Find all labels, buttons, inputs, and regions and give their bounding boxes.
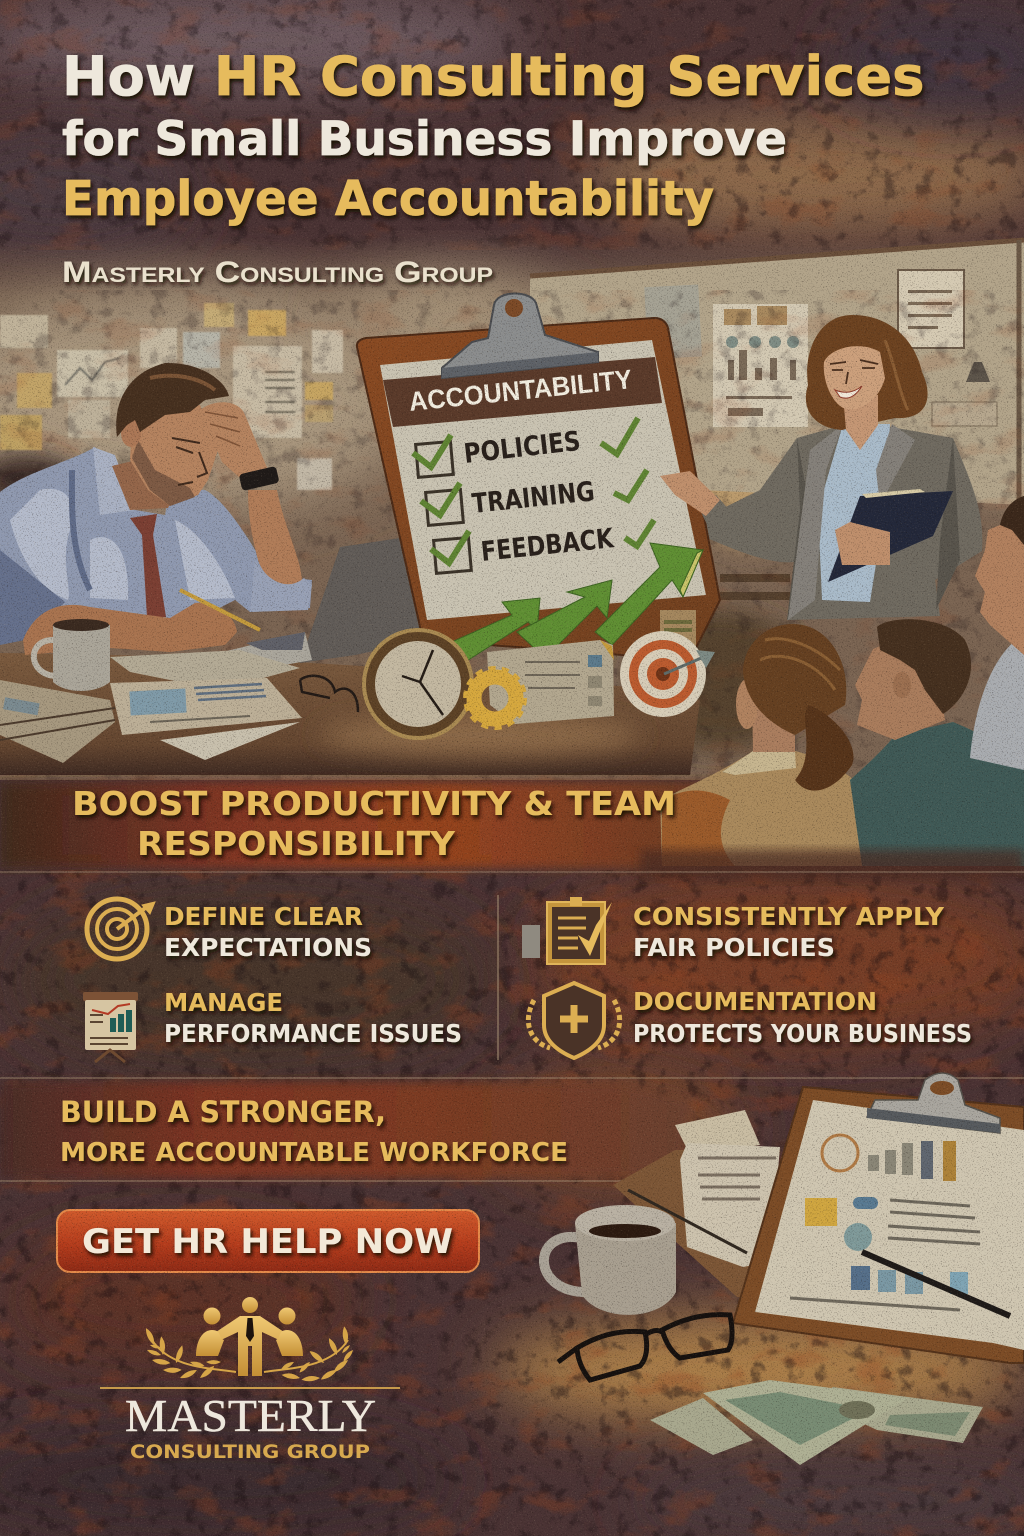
hair (806, 315, 928, 430)
stressed employee (0, 363, 312, 672)
banner heading: productivity: BOOST PRODUCTIVITY & TEAM (72, 784, 676, 823)
banner heading: workforce: MORE ACCOUNTABLE WORKFORCE (60, 1138, 568, 1168)
metal clip (442, 293, 598, 378)
office wall (0, 238, 1024, 780)
icon: target (87, 899, 155, 959)
title line 2: for Small Business Improve (62, 112, 787, 167)
blouse (818, 424, 890, 602)
presenter pointing hand over clipboard (660, 471, 738, 535)
checkboxes and checks (413, 418, 654, 573)
desk (0, 653, 700, 775)
icon: checklist clipboard (522, 897, 612, 964)
call to action label: GET HR HELP NOW (82, 1222, 453, 1262)
logo figures (196, 1297, 303, 1376)
folder of documents (487, 640, 614, 724)
benefits panel tone (0, 871, 1024, 873)
clipboard: accountability (357, 293, 738, 738)
presenter (700, 315, 982, 620)
checklist (462, 426, 616, 568)
banner heading: workforce (60, 1095, 568, 1168)
logo wordmark: MASTERLY (125, 1390, 376, 1441)
neck (843, 395, 878, 450)
heading text: ACCOUNTABILITY (408, 364, 633, 417)
pen on clipboard (862, 1252, 1010, 1316)
pen (180, 590, 260, 630)
checklist: POLICIES (462, 426, 582, 470)
company logo: CONSULTING GROUP (130, 1441, 370, 1463)
benefit: manage performance issues: PERFORMANCE ISSUES (164, 1019, 462, 1048)
benefit: consistently apply fair policies (522, 897, 945, 964)
shirt and torso (0, 447, 312, 645)
face (130, 405, 218, 506)
panel shape: workforce banner (0, 1078, 1024, 1181)
benefits divider (497, 895, 499, 1060)
company logo (100, 1297, 400, 1463)
seated woman (660, 624, 893, 866)
title line 3: Employee Accountability (62, 171, 714, 227)
benefit: manage performance issues: MANAGE (164, 988, 283, 1017)
title (62, 45, 924, 227)
banner heading: productivity (72, 784, 676, 863)
paper (380, 340, 706, 620)
mottled rust on plain background (0, 0, 1024, 250)
coffee mug (544, 1205, 676, 1315)
hair (116, 363, 229, 437)
panel shape: productivity banner (0, 782, 720, 868)
desk still life (544, 1073, 1024, 1465)
panel: benefits (83, 895, 972, 1062)
face (824, 346, 885, 409)
icon: presentation board (83, 992, 138, 1062)
benefit: documentation protects your business: PROTECTS YOUR BUSINESS (633, 1019, 972, 1048)
benefit: manage performance issues (83, 988, 462, 1062)
benefit: consistently apply fair policies: CONSISTENTLY APPLY (633, 902, 945, 931)
laptop behind clipboard (300, 538, 425, 663)
coffee mug on desk (34, 619, 110, 691)
blazer (700, 425, 982, 620)
neck (112, 458, 178, 510)
cash (650, 1380, 983, 1465)
tie (130, 514, 166, 617)
benefit: documentation protects your business: DOCUMENTATION (633, 987, 877, 1016)
writing arm (23, 603, 237, 655)
benefit: define clear expectations: EXPECTATIONS (164, 933, 372, 962)
eyeglasses on desk (300, 676, 358, 712)
raised forearm (248, 490, 302, 585)
heading band (383, 357, 662, 427)
target (620, 631, 715, 717)
growth arrows (445, 543, 703, 662)
logo laurels (146, 1326, 355, 1383)
eyeglasses (558, 1315, 732, 1380)
checklist: TRAINING (470, 476, 596, 520)
pocket watch (364, 630, 472, 738)
watch (239, 466, 280, 491)
audience (640, 496, 1024, 880)
whiteboard (530, 240, 1024, 520)
button base (57, 1210, 479, 1272)
man at right edge (970, 496, 1024, 770)
wall weathering (0, 290, 1024, 780)
banner heading: productivity: RESPONSIBILITY (137, 824, 456, 863)
hand on forehead (200, 402, 268, 478)
banner heading: workforce: BUILD A STRONGER, (60, 1095, 386, 1129)
benefit: consistently apply fair policies: FAIR POLICIES (633, 933, 835, 962)
held folder (828, 491, 953, 582)
desk papers (0, 650, 302, 763)
small box behind target (660, 610, 696, 648)
gear (466, 669, 524, 727)
icon: shield with laurel (528, 983, 620, 1058)
clipboard with report (733, 1073, 1024, 1363)
laptop keyboard (210, 632, 312, 672)
checklist: FEEDBACK (479, 523, 616, 568)
back papers and tray (613, 1110, 780, 1300)
benefit: documentation protects your business (528, 983, 972, 1058)
pinned notes on wall (0, 303, 343, 490)
title line 1: HR Consulting Services (214, 45, 924, 108)
title line 1: How (62, 45, 214, 108)
seated man (850, 619, 1024, 866)
benefit: define clear expectations: DEFINE CLEAR (164, 902, 363, 931)
benefit: define clear expectations (87, 899, 372, 962)
board (357, 318, 720, 660)
brand subtitle: Masterly Consulting Group (62, 256, 493, 289)
